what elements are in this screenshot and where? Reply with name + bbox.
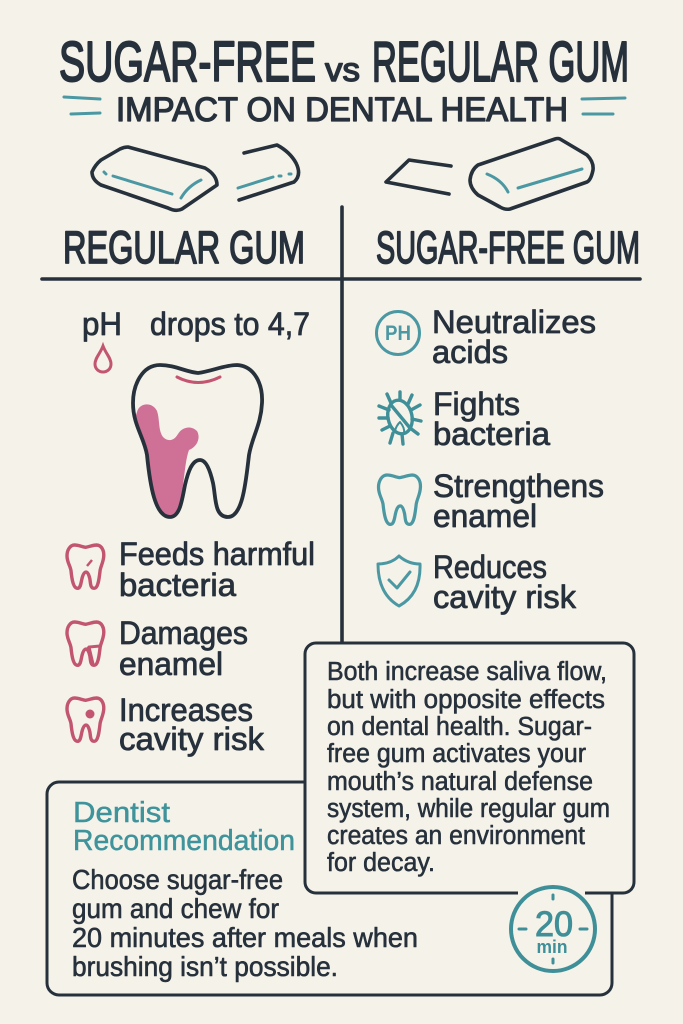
recommendation text: brushing isn’t possible. (72, 951, 338, 982)
recommendation heading: Recommendation (73, 825, 295, 857)
callout: saliva flow: on dental health. Sugar- (327, 713, 592, 741)
icon: 20 minute timer: min (536, 937, 568, 957)
item: feeds harmful bacteria: Feeds harmful (119, 536, 315, 572)
item: neutralizes acids: acids (432, 334, 508, 370)
recommendation text: gum and chew for (72, 893, 279, 924)
item: increases cavity risk: Increases (119, 692, 253, 728)
icon: 20 minute timer: 20 (535, 905, 573, 944)
item: strengthens enamel (378, 468, 604, 534)
item: increases cavity risk (67, 692, 265, 757)
panel: sugar-free gum (376, 304, 604, 615)
title (59, 30, 629, 94)
icon: sugar-free gum broken stick (386, 138, 593, 209)
item: damages enamel (67, 615, 248, 682)
item: fights bacteria (379, 386, 550, 452)
item: damages enamel: Damages (119, 615, 248, 651)
pH label: pH (82, 306, 122, 342)
heading: regular gum: REGULAR GUM (63, 222, 305, 273)
panel: regular gum (67, 306, 315, 757)
pH label: drops to 4,7 (150, 306, 310, 342)
callout: saliva flow: Both increase saliva flow, (327, 658, 607, 686)
callout: saliva flow: but with opposite effects (327, 686, 605, 714)
item: reduces cavity risk (378, 549, 577, 615)
icon: acid drop (95, 346, 111, 372)
recommendation heading (73, 797, 295, 857)
item: neutralizes acids: Neutralizes (432, 304, 596, 340)
item: fights bacteria: Fights (433, 386, 520, 422)
icon: regular gum broken stick (92, 145, 299, 210)
icon: decayed tooth (133, 365, 262, 517)
panel: dentist recommendation (47, 782, 612, 995)
item: reduces cavity risk: Reduces (433, 549, 547, 585)
item: reduces cavity risk: cavity risk (433, 579, 577, 615)
item: feeds harmful bacteria: bacteria (119, 567, 236, 603)
item: neutralizes acids: PH (385, 322, 411, 345)
recommendation heading: Dentist (73, 797, 170, 829)
item: feeds harmful bacteria (67, 536, 315, 603)
icon: 20 minute timer (511, 886, 595, 971)
item: fights bacteria: bacteria (433, 416, 550, 452)
title: vs (325, 51, 360, 88)
item: neutralizes acids (376, 304, 596, 370)
callout: saliva flow: system, while regular gum (327, 795, 610, 823)
title: SUGAR-FREE (59, 30, 316, 94)
item: damages enamel: enamel (119, 646, 223, 682)
callout: saliva flow (305, 643, 634, 893)
item: strengthens enamel: enamel (433, 498, 537, 534)
item: increases cavity risk: cavity risk (119, 721, 265, 757)
callout: saliva flow: for decay. (327, 849, 435, 877)
pH label (82, 306, 310, 342)
subtitle: IMPACT ON DENTAL HEALTH (116, 91, 568, 129)
recommendation text: Choose sugar-free (72, 864, 283, 895)
recommendation text (72, 864, 418, 982)
callout: saliva flow: mouth’s natural defense (327, 768, 593, 796)
callout: saliva flow: creates an environment (327, 822, 585, 850)
recommendation text: 20 minutes after meals when (72, 922, 418, 953)
item: strengthens enamel: Strengthens (433, 468, 604, 504)
column divider lines (42, 207, 640, 644)
callout: saliva flow: free gum activates your (327, 740, 586, 768)
